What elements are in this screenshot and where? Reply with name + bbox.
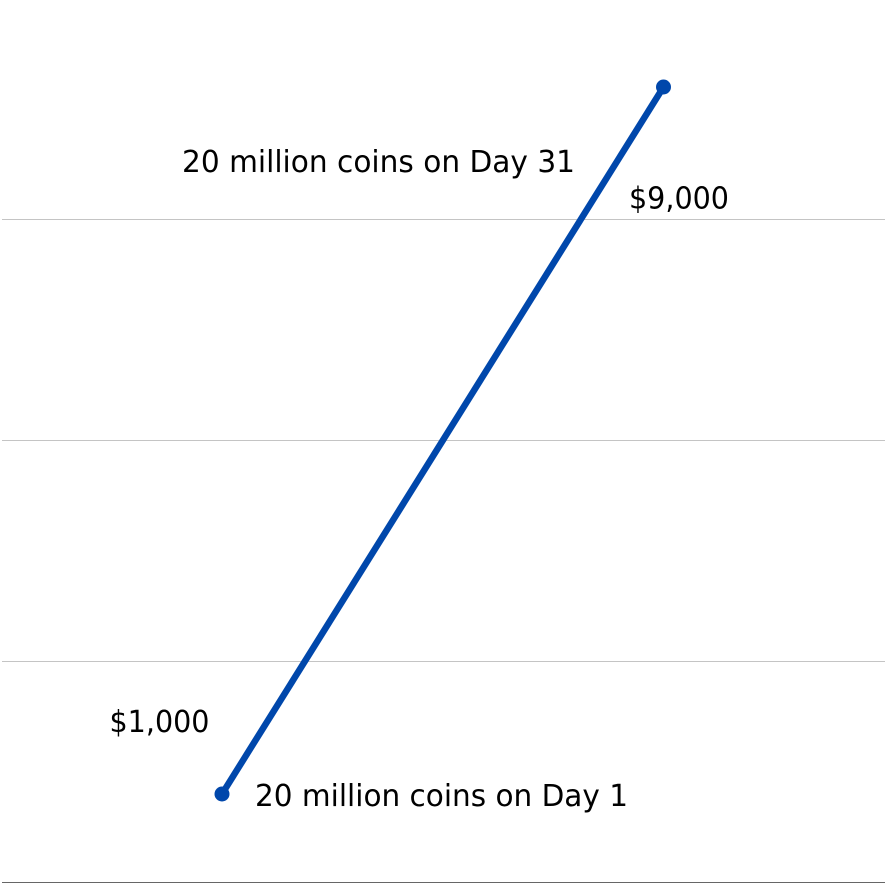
label: start price: $1,000 (110, 705, 210, 740)
label: start coins: 20 million coins on Day 1 (255, 779, 628, 814)
label: end price: $9,000 (629, 182, 729, 216)
data line (214, 80, 671, 802)
x axis (2, 882, 885, 884)
label: end coins: 20 million coins on Day 31 (182, 145, 575, 180)
